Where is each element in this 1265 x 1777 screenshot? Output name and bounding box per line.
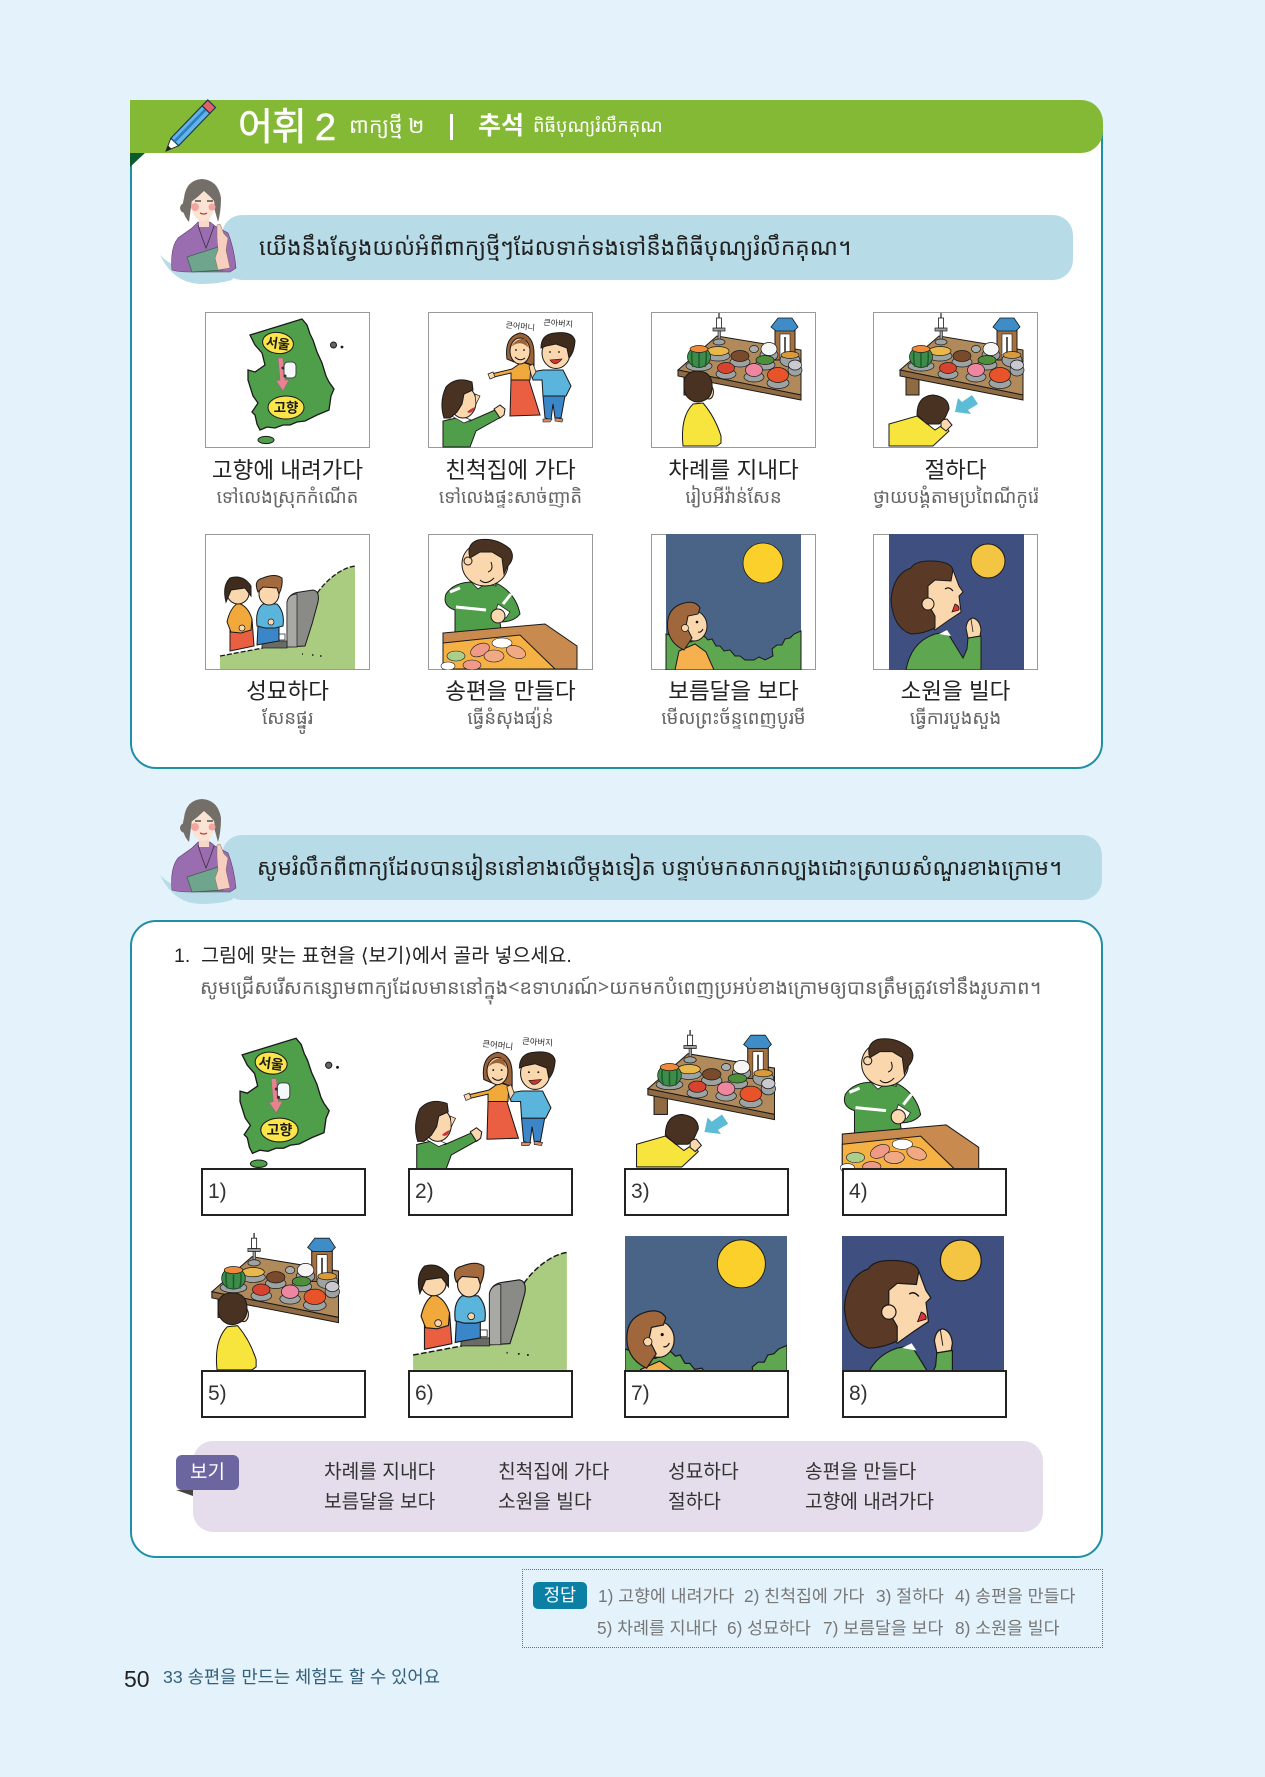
picture card 4 [873,312,1038,448]
answer box 4: 4) [849,1180,868,1203]
exercise image 1 [239,1038,339,1168]
picture card 2 [428,312,593,448]
answer box 8: 8) [849,1382,868,1405]
question translation: សូមជ្រើសរើសកន្សោមពាក្យដែលមាននៅក្នុង<ឧទាហរណ៍>យកមកបំពេញប្រអប់ខាងក្រោមឲ្យបានត្រឹមត្រូវទៅនឹងរូបភាព។ [200,973,1041,1000]
bubble body [222,835,1102,900]
answer box 4 [842,1168,1007,1216]
picture card 6 [428,534,593,670]
answer box 1: 1) [208,1180,227,1203]
answer box 2: 2) [415,1180,434,1203]
label: make songpyeon: 송편을 만들다 [445,679,576,704]
word: 성묘하다 [668,1462,739,1483]
answer box 2 [408,1168,573,1216]
answer: 2) 친척집에 가다 [744,1586,864,1606]
answer box 5: 5) [208,1382,227,1405]
banner bar [130,100,1103,153]
answer: 8) 소원을 빌다 [955,1618,1059,1638]
label: go down to hometown: 고향에 내려가다 [212,458,363,483]
footer title: 33 송편을 만드는 체험도 할 수 있어요 [163,1667,440,1687]
icon: teacher [171,179,236,272]
picture card 5 [205,534,370,670]
Khmer label 2: ទៅលេងផ្ទះសាច់ញាតិ [439,484,582,509]
exercise image 2 [415,1037,556,1168]
bubble tail [160,255,233,284]
answer box 5 [201,1370,366,1418]
divider bar [450,114,453,140]
exercise image 5 [210,1233,340,1370]
label: visit grave: 성묘하다 [246,679,329,704]
exercise image 6 [413,1252,567,1370]
answer box 7 [624,1370,789,1418]
example box [176,1441,1043,1532]
answer box 3: 3) [631,1180,650,1203]
bubble body [222,215,1073,280]
answer box 1 [201,1168,366,1216]
Khmer label 7: មើលព្រះច័ន្ទពេញបូរមី [661,705,806,730]
exercise image 8 [842,1236,1004,1370]
heading: Chuseok: 추석 [478,112,524,140]
tag fold [176,1490,193,1496]
answer: 3) 절하다 [876,1586,944,1606]
word list [324,1462,934,1512]
icon: teacher [171,799,236,892]
panel: vocabulary section [130,130,1103,769]
answer key [522,1569,1103,1648]
bubble text: យើងនឹងស្វែងយល់អំពីពាក្យថ្មីៗដែលទាក់ទងទៅនឹងពិធីបុណ្យរំលឹកគុណ។ [259,231,851,262]
word: 절하다 [668,1492,721,1512]
heading: vocabulary 2: 어휘 2 [238,107,335,149]
picture card 3 [651,312,816,448]
Khmer label 8: ធ្វើការបួងសួង [910,705,1001,730]
example background [193,1441,1043,1532]
answer: 4) 송편을 만들다 [955,1586,1075,1606]
answer: 5) 차례를 지내다 [597,1618,717,1638]
picture card 1 [205,312,370,448]
speech bubble: exercise instruction [160,799,1102,904]
Khmer label 6: ធ្វើនំសុងផ្យ៉ន់ [467,705,554,730]
answer tag: 정답 [544,1585,576,1605]
exercise image 3 [636,1030,776,1168]
panel: exercise [130,920,1103,1558]
label: hold ancestral rite: 차례를 지내다 [668,458,799,483]
label: bow: 절하다 [924,458,987,483]
header banner [130,99,1103,167]
answer box 3 [624,1168,789,1216]
question text: 1. 그림에 맞는 표현을 ⟨보기⟩에서 골라 넣으세요. [174,945,572,967]
speech bubble: intro [160,179,1073,284]
icon: pencil [165,99,216,152]
example tag: 보기 [190,1462,225,1483]
example tag [176,1455,239,1490]
Khmer label 1: ទៅលេងស្រុកកំណើត [217,484,358,509]
Khmer label 3: រៀបអីវ៉ាន់សែន [685,484,782,509]
word: 친척집에 가다 [498,1462,609,1483]
answer box 7: 7) [631,1382,650,1405]
answer box 6: 6) [415,1382,434,1405]
exercise image 4 [840,1038,980,1172]
label: make a wish: 소원을 빌다 [901,679,1010,704]
heading: Khmer Chuseok: ពិធីបុណ្យរំលឹកគុណ [533,114,663,138]
Khmer label 5: សែនផ្នូរ [262,705,313,730]
Khmer label 4: ថ្វាយបង្គំតាមប្រពៃណីកូរ៉េ [873,484,1039,509]
answer box 8 [842,1370,1007,1418]
answer box 6 [408,1370,573,1418]
picture card 7 [651,534,816,670]
word: 송편을 만들다 [805,1462,916,1483]
picture card 8 [873,534,1038,670]
answer tag [533,1582,587,1609]
banner fold [130,153,145,167]
heading: Khmer vocabulary: ពាក្យថ្មី ២ [349,111,424,140]
answer: 6) 성묘하다 [727,1618,811,1638]
page number: 50 [124,1666,150,1692]
answer: 7) 보름달을 보다 [823,1618,943,1638]
exercise image 7 [625,1236,787,1370]
label: visit relatives: 친척집에 가다 [445,458,576,483]
answer: 1) 고향에 내려가다 [598,1586,734,1606]
word: 소원을 빌다 [498,1492,592,1512]
word: 보름달을 보다 [324,1492,435,1512]
bubble text: សូមរំលឹកពីពាក្យដែលបានរៀននៅខាងលើម្តងទៀត បន្ទាប់មកសាកល្បងដោះស្រាយសំណួរខាងក្រោម។ [257,851,1062,882]
bubble tail [160,875,233,904]
word: 고향에 내려가다 [805,1492,934,1512]
label: see full moon: 보름달을 보다 [668,679,799,704]
word: 차례를 지내다 [324,1462,435,1483]
